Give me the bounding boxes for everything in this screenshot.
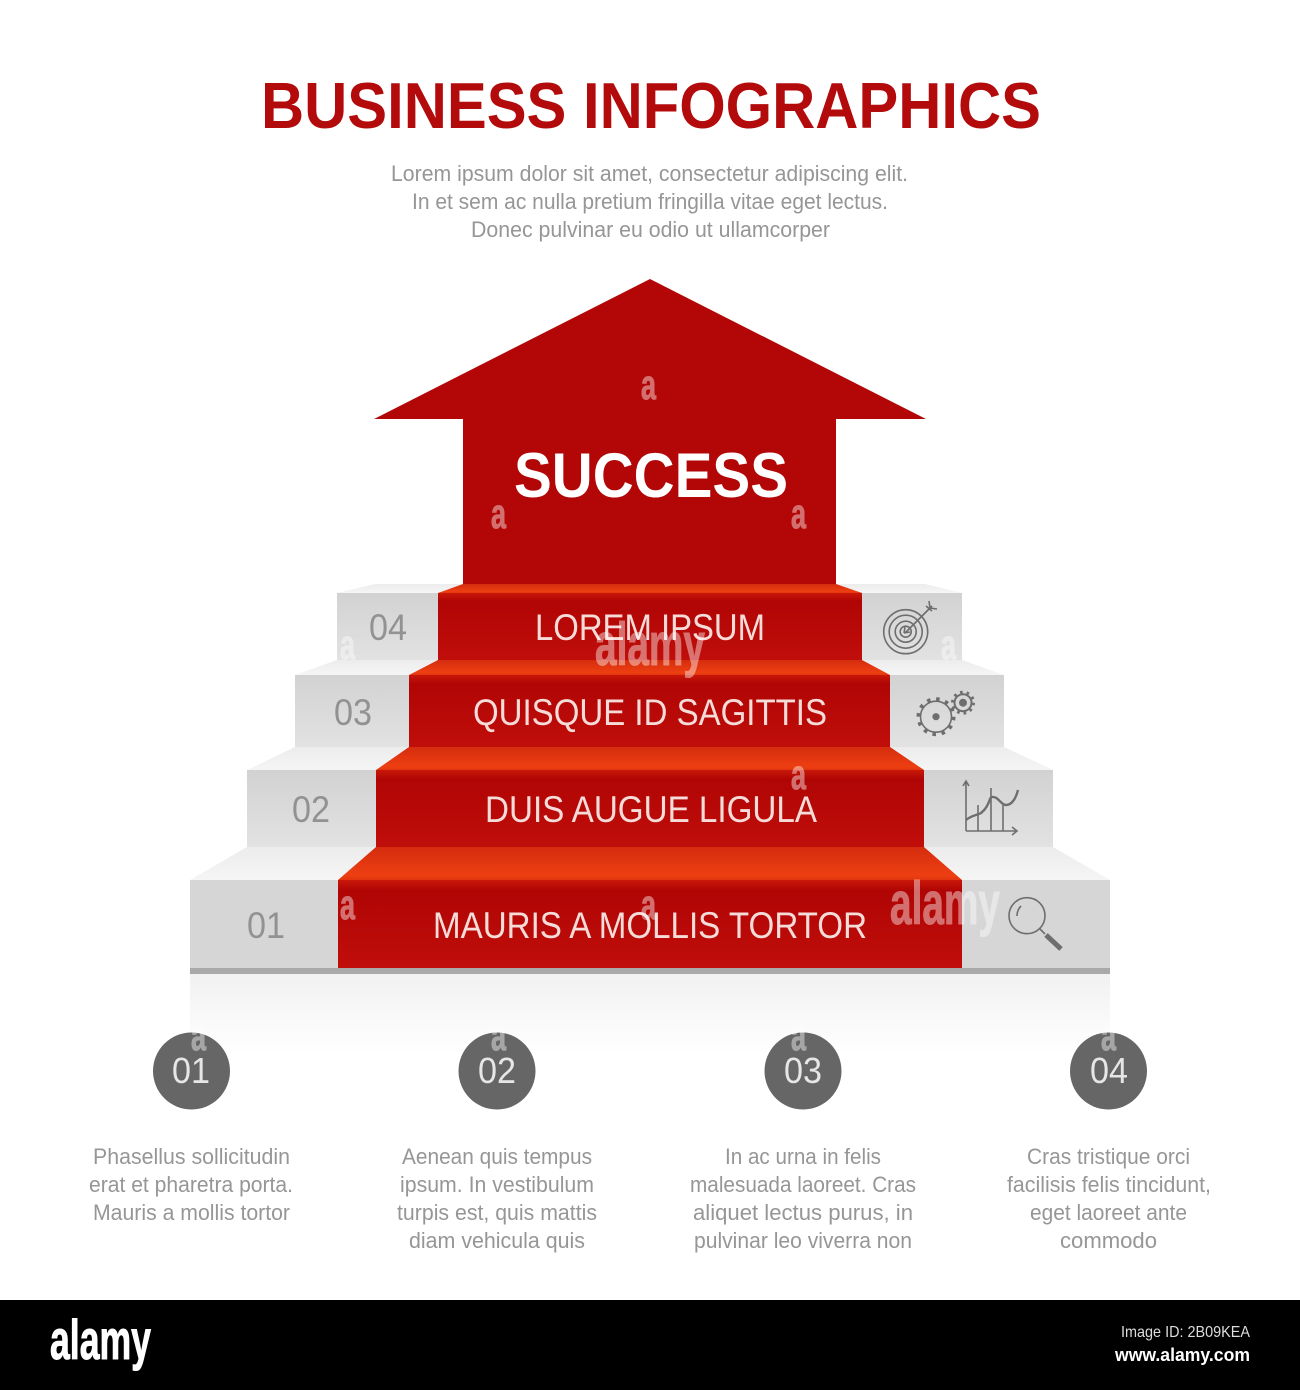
step 03: QUISQUE ID SAGITTIS [473,692,827,733]
watermarks: a [791,751,806,798]
watermarks [191,361,1116,1059]
number circles: 01 [172,1050,210,1091]
text column 2: diam vehicula quis [409,1228,585,1253]
step 01: 01 [247,905,285,946]
step 02: 02 [292,789,330,830]
step 03 [295,660,1004,747]
footer bar [0,1300,1300,1390]
text column 2: Aenean quis tempus [402,1144,592,1169]
watermarks: a [340,881,355,928]
title: BUSINESS INFOGRAPHICS [261,69,1041,142]
footer bar: alamy [50,1308,151,1371]
watermarks: a [491,490,506,537]
step 04 [337,584,962,660]
watermarks: a [340,621,355,668]
watermarks: a [791,1012,806,1059]
text column 3: malesuada laoreet. Cras [690,1172,916,1197]
text column 1: Phasellus sollicitudin [93,1144,290,1169]
text column 1: Mauris a mollis tortor [93,1200,290,1225]
step 03: 03 [334,692,372,733]
text column 2: turpis est, quis mattis [397,1200,597,1225]
text column 1 [89,1144,293,1225]
icon: target [884,601,937,654]
arrow: success: SUCCESS [514,441,788,511]
step 04: 04 [369,607,407,648]
step 01 [190,847,1110,974]
text column 3: In ac urna in felis [725,1144,881,1169]
text column 3: aliquet lectus purus, in [693,1200,913,1225]
intro text: Donec pulvinar eu odio ut ullamcorper [471,217,830,242]
watermarks: a [941,621,956,668]
watermarks: alamy [890,870,1000,937]
icon: gears [918,692,974,734]
icon: chart [963,781,1018,835]
text column 4: facilisis felis tincidunt, [1007,1172,1211,1197]
watermarks: alamy [595,611,705,678]
text column 4: commodo [1060,1228,1157,1253]
step 01: MAURIS A MOLLIS TORTOR [433,905,867,946]
floor reflection [190,974,1110,1054]
number circles: 04 [1090,1050,1128,1091]
watermarks: a [641,881,656,928]
text column 4: Cras tristique orci [1027,1144,1190,1169]
text column 3 [690,1144,916,1253]
text column 4 [1007,1144,1211,1253]
number circles: 02 [478,1050,516,1091]
number circles: 03 [784,1050,822,1091]
arrow: success [374,279,926,584]
watermarks: a [641,361,656,408]
step 04: LOREM IPSUM [535,607,765,648]
watermarks: a [191,1012,206,1059]
watermarks: a [491,1012,506,1059]
watermarks: a [1101,1012,1116,1059]
text column 2: ipsum. In vestibulum [400,1172,594,1197]
icon: magnifier [1009,898,1061,949]
step 02: DUIS AUGUE LIGULA [485,789,817,830]
text column 4: eget laoreet ante [1030,1200,1187,1225]
text column 2 [397,1144,597,1253]
text column 1: erat et pharetra porta. [89,1172,293,1197]
text column 3: pulvinar leo viverra non [694,1228,912,1253]
intro text: In et sem ac nulla pretium fringilla vitae eget lectus. [412,189,888,214]
footer bar: Image ID: 2B09KEA [1121,1324,1250,1341]
stairs [190,584,1110,974]
intro text: Lorem ipsum dolor sit amet, consectetur adipiscing elit. [391,161,908,186]
intro text [391,161,908,242]
step 02 [247,747,1053,847]
watermarks: a [791,490,806,537]
footer bar: www.alamy.com [1114,1345,1250,1365]
number circles [153,1032,1147,1110]
